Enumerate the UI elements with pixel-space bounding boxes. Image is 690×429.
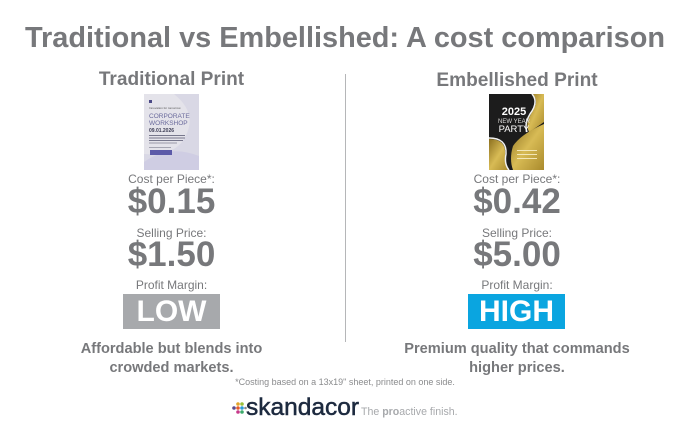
icon: corporate workshop flyer: WORKSHOP bbox=[149, 120, 188, 127]
heading: embellished print: Embellished Print bbox=[436, 70, 598, 91]
footnote: *Costing based on a 13x19" sheet, printed on one side. bbox=[235, 377, 455, 387]
icon: corporate workshop flyer: CORPORATE bbox=[149, 113, 190, 120]
icon: corporate workshop flyer: 09.01.2026 bbox=[149, 128, 174, 134]
description: traditional: Affordable but blends into bbox=[81, 341, 262, 357]
logo: skandacor bbox=[232, 394, 458, 421]
icon: new year party flyer bbox=[489, 94, 544, 170]
label: cost per piece: Cost per Piece*: bbox=[474, 172, 560, 186]
label: profit margin: Profit Margin: bbox=[136, 278, 207, 292]
icon: new year party flyer: PARTY bbox=[499, 124, 530, 135]
panel: embellished print bbox=[404, 70, 630, 376]
badge: low: LOW bbox=[136, 295, 206, 328]
icon: corporate workshop flyer: Innovation for tomorrow bbox=[149, 106, 181, 110]
title: Traditional vs Embellished: A cost comparison bbox=[25, 22, 665, 54]
heading: traditional print: Traditional Print bbox=[99, 69, 244, 90]
description: embellished bbox=[404, 341, 630, 376]
label: selling price: Selling Price: bbox=[482, 226, 552, 240]
label: profit margin: Profit Margin: bbox=[481, 278, 553, 292]
wordmark: skandacor bbox=[246, 394, 359, 421]
divider bbox=[345, 74, 346, 342]
icon: new year party flyer: 2025 bbox=[502, 106, 526, 118]
value: selling price: $1.50 bbox=[128, 235, 215, 274]
description: embellished: higher prices. bbox=[469, 360, 565, 376]
tagline: The proactive finish. bbox=[361, 406, 458, 418]
badge: low bbox=[123, 294, 220, 329]
badge: high: HIGH bbox=[479, 295, 554, 328]
description: traditional bbox=[81, 341, 262, 376]
panel: traditional print bbox=[81, 69, 262, 376]
value: selling price: $5.00 bbox=[473, 235, 561, 274]
icon: new year party flyer: NEW YEAR bbox=[498, 119, 531, 125]
icon: logo dots bbox=[232, 402, 247, 414]
description: traditional: crowded markets. bbox=[109, 360, 234, 376]
value: cost per piece: $0.15 bbox=[128, 182, 215, 221]
description: embellished: Premium quality that commands bbox=[404, 341, 630, 357]
label: selling price: Selling Price: bbox=[136, 226, 207, 240]
label: cost per piece: Cost per Piece*: bbox=[128, 172, 215, 186]
value: cost per piece: $0.42 bbox=[473, 182, 561, 221]
icon: corporate workshop flyer bbox=[144, 94, 199, 170]
